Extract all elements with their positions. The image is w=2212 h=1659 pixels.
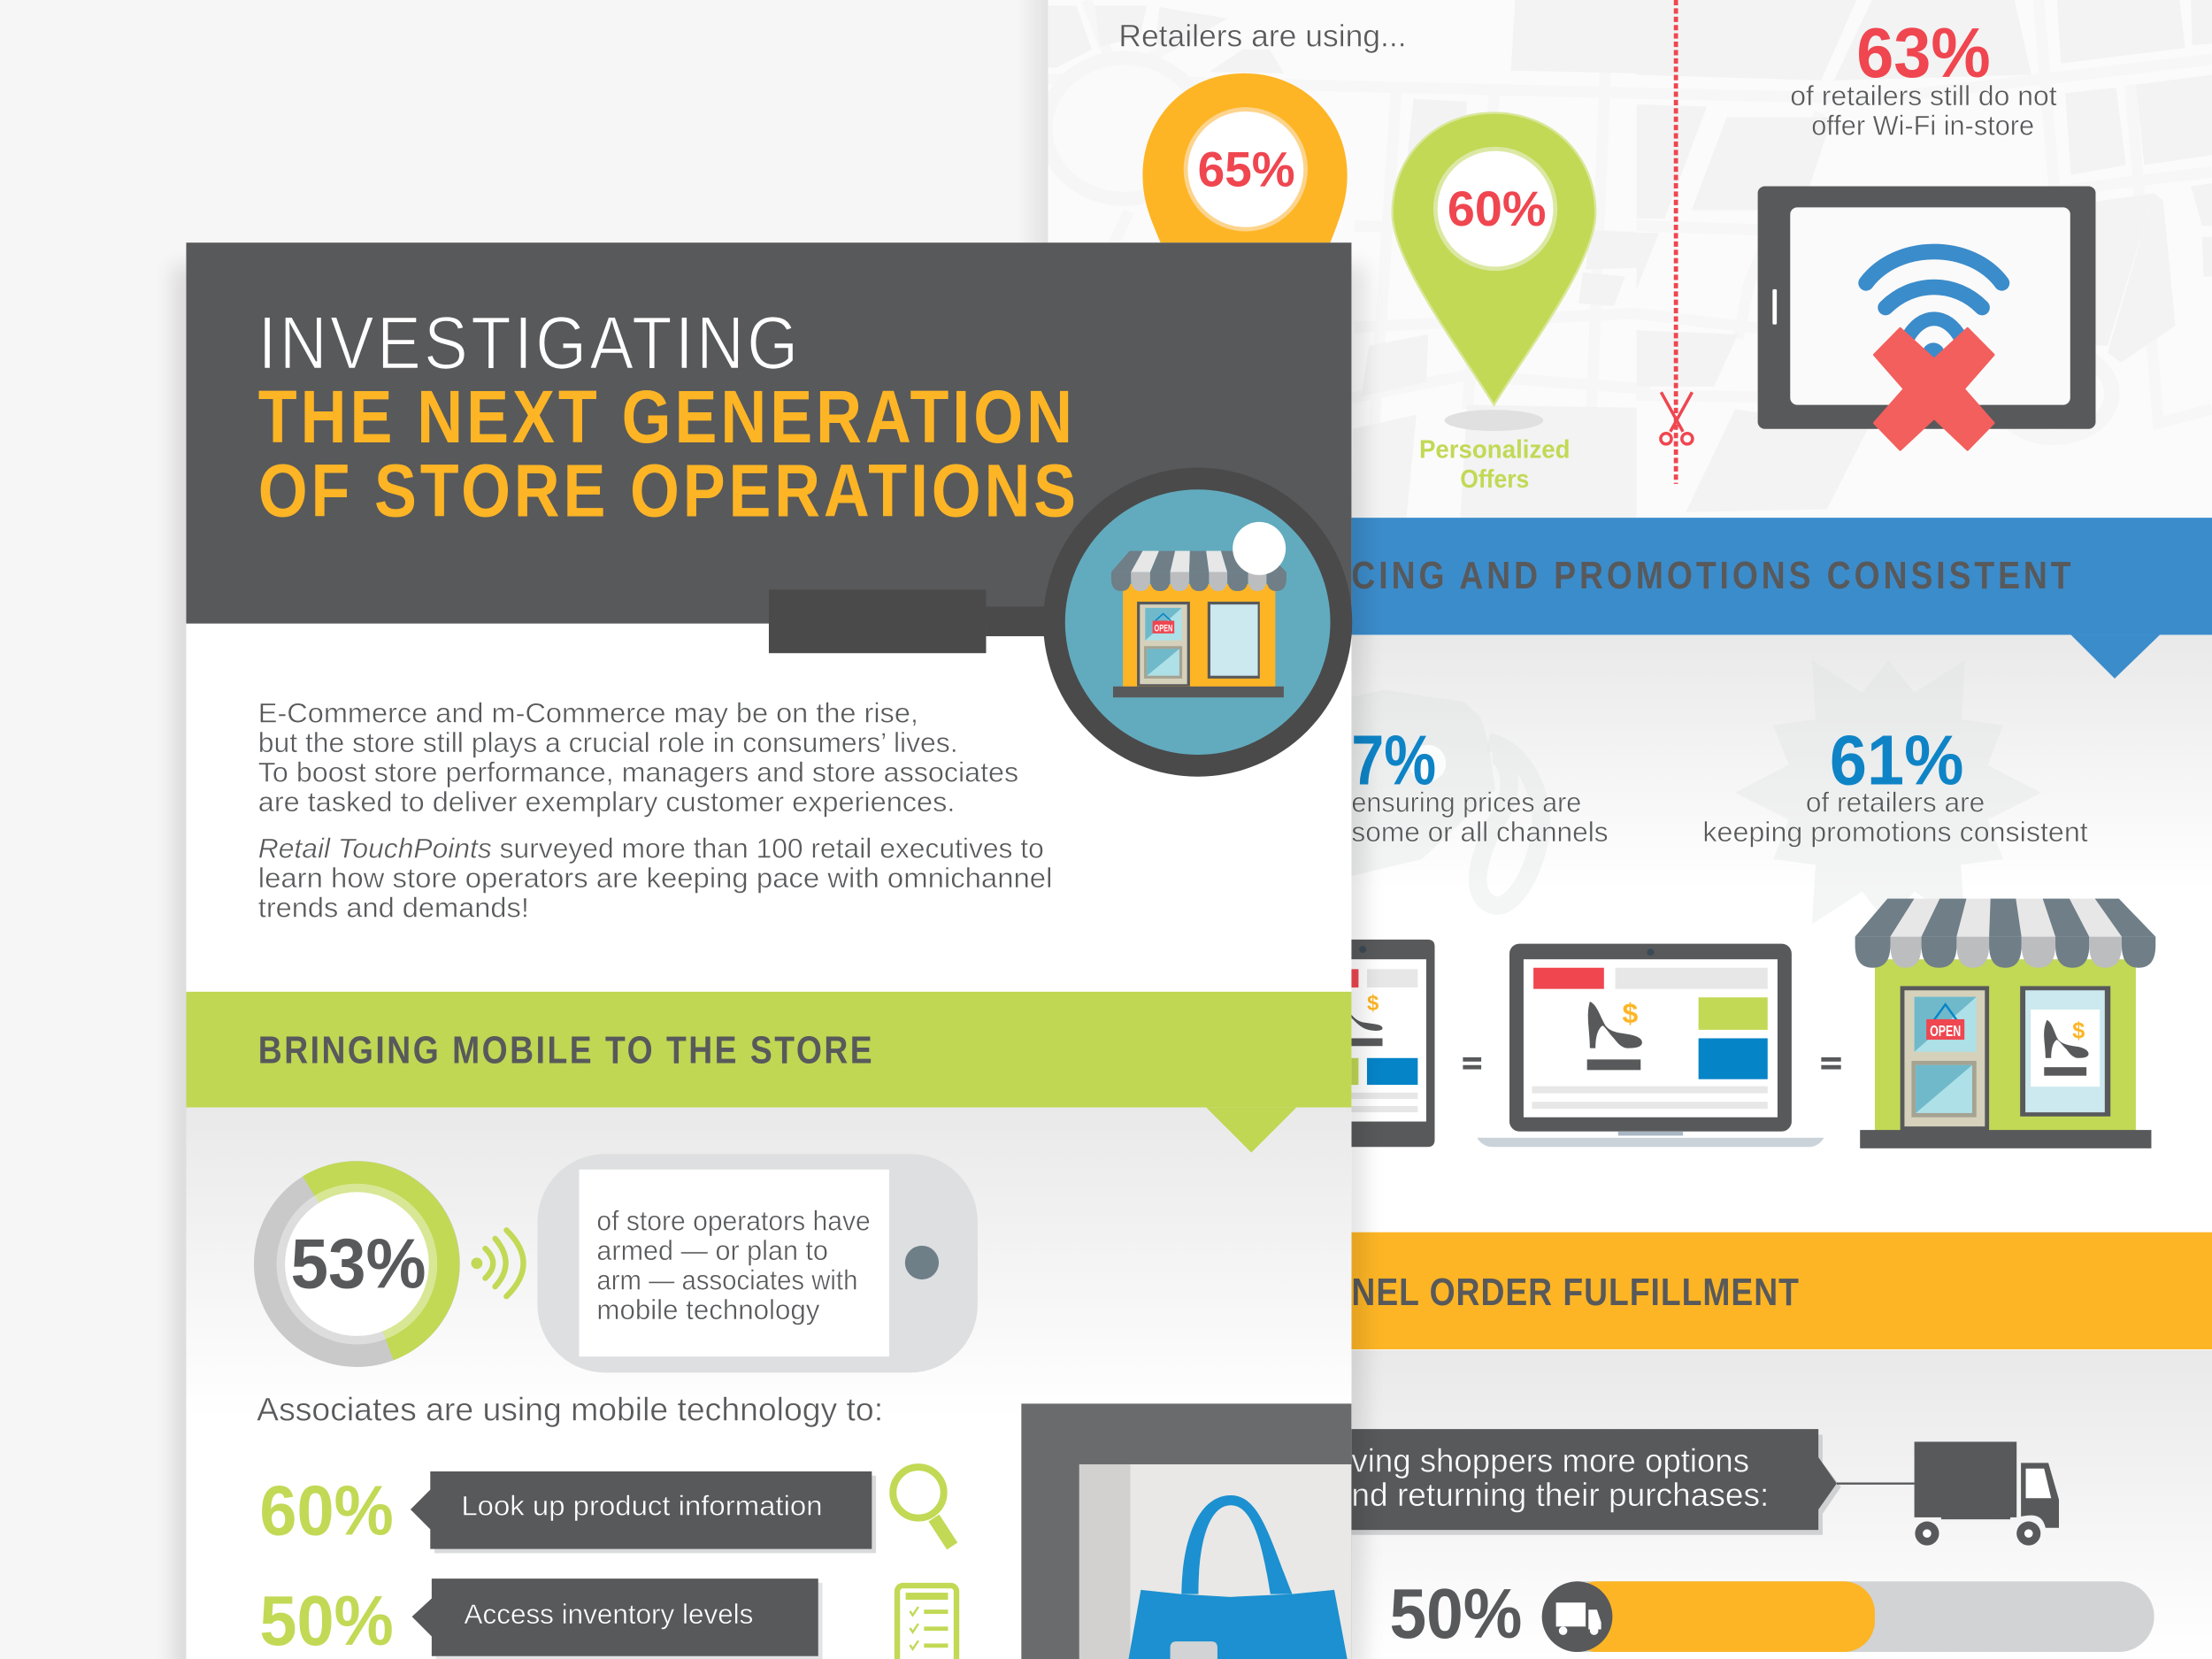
stat row: 60 percent look up — [259, 1467, 952, 1553]
decorative starburst — [1735, 660, 2041, 924]
stat: 61 percent promotions: keeping promotions consistent — [1702, 816, 2088, 848]
equals sign — [1821, 1057, 1841, 1070]
pin: 65 percent: 65% — [1198, 141, 1295, 196]
phone callout: of store operators have — [596, 1204, 871, 1236]
icon: tablet with product page — [1326, 940, 1434, 1147]
stat row: 50 percent inventory: Access inventory levels — [465, 1598, 753, 1630]
banner: pricing and promotions — [1048, 518, 2212, 888]
donut chart: 53 percent: 53% — [290, 1225, 426, 1303]
panel: shopping bag — [1021, 1403, 1351, 1659]
store — [1111, 522, 1286, 697]
text: retailers are using: Retailers are using... — [1118, 19, 1407, 54]
front sheet — [173, 242, 1365, 1659]
subheading: associates: Associates are using mobile technology to: — [257, 1392, 883, 1428]
door: OPEN — [1930, 1022, 1961, 1040]
title: OF STORE OPERATIONS — [258, 449, 1076, 533]
phone callout: mobile technology — [596, 1294, 819, 1325]
stat: 7 percent prices: some or all channels — [1351, 816, 1609, 848]
bag body — [1129, 1590, 1348, 1659]
title: INVESTIGATING — [258, 301, 798, 385]
stat: 63 percent no wifi: 63% — [1856, 13, 1991, 92]
connector line — [1837, 1483, 1915, 1485]
stat row: 50 percent inventory: 50% — [259, 1581, 394, 1659]
pin shadow — [1445, 410, 1543, 431]
dashed cut line — [1675, 0, 1678, 484]
banner: omnichannel order fulfillment — [1048, 1233, 2212, 1659]
wifi symbol — [1866, 251, 2001, 339]
stat: 7 percent prices: ensuring prices are — [1351, 787, 1581, 818]
awning — [1855, 899, 2155, 968]
decorative price tag behind 7 percent — [1351, 690, 1541, 906]
stat row: 60 percent look up: 60% — [259, 1471, 394, 1550]
text block: intro: E-Commerce and m-Commerce may be on the rise, — [258, 696, 918, 728]
header — [186, 242, 1351, 624]
pin label: Personalized — [1419, 435, 1571, 464]
red cross — [1875, 328, 1993, 449]
title — [258, 301, 1076, 533]
pin: 60 percent personalized offers — [1393, 113, 1595, 494]
pin marker — [1393, 113, 1595, 405]
icon: checklist — [897, 1586, 956, 1659]
equals sign — [1463, 1057, 1481, 1070]
bag tag — [1171, 1641, 1217, 1659]
phone callout: arm — associates with — [596, 1263, 857, 1295]
stat: 7 percent prices — [1351, 720, 1609, 848]
stat row: 50 percent inventory — [259, 1578, 956, 1659]
track — [1542, 1581, 2154, 1652]
store window — [2020, 986, 2110, 1117]
icon: delivery truck — [1915, 1441, 2059, 1546]
stat: 50 percent progress bar: 50% — [1389, 1574, 1522, 1653]
stat: 63 percent no wifi: of retailers still do not — [1790, 80, 2057, 111]
text block: intro: are tasked to deliver exemplary customer experiences. — [258, 786, 955, 818]
fill — [1566, 1581, 1875, 1652]
title: THE NEXT GENERATION — [258, 374, 1072, 458]
door — [1901, 986, 1989, 1133]
icon: tablet with product page: $ — [1367, 992, 1379, 1016]
panel: map background — [1045, 0, 2212, 518]
pin: 65 percent — [1142, 73, 1348, 254]
pin label — [1419, 435, 1571, 494]
text block: intro: learn how store operators are keeping pace with omnichannel — [258, 862, 1052, 894]
text block: intro: To boost store performance, managers and store associates — [258, 756, 1018, 787]
icon: scissors — [1661, 392, 1693, 444]
icon: magnifier — [893, 1467, 952, 1546]
banner: omnichannel order fulfillment: NEL ORDER FULFILLMENT — [1351, 1270, 1799, 1314]
banner: bringing mobile to the store — [186, 992, 1351, 1417]
truck badge — [1542, 1581, 1612, 1652]
stat: 63 percent no wifi: offer Wi-Fi in-store — [1811, 109, 2034, 141]
icon: laptop with product page: $ — [1623, 997, 1639, 1029]
text block: intro — [258, 696, 1052, 923]
store: OPEN — [1155, 624, 1172, 634]
back sheet — [1018, 0, 2212, 1659]
icon: green store front — [1855, 899, 2155, 1148]
pin: 60 percent personalized offers: 60% — [1448, 180, 1546, 236]
icon: laptop with product page — [1477, 944, 1824, 1147]
icon: signal waves — [472, 1230, 524, 1296]
stat: 50 percent progress bar — [1389, 1574, 2154, 1653]
stat: 61 percent promotions: 61% — [1830, 720, 1963, 799]
stat row: 60 percent look up: Look up product information — [461, 1489, 823, 1521]
donut chart: 53 percent — [254, 1161, 460, 1367]
stat: 61 percent promotions — [1702, 720, 2088, 848]
icon: tablet no wifi — [1758, 186, 2095, 449]
banner: bringing mobile to the store: BRINGING MOBILE TO THE STORE — [258, 1028, 872, 1071]
callout: giving shoppers more options: ving shoppers more options — [1351, 1443, 1749, 1479]
high heel shoe — [1588, 1002, 1642, 1048]
banner: pricing and promotions: CING AND PROMOTIONS CONSISTENT — [1351, 553, 2071, 597]
text block: intro: but the store still plays a crucial role in consumers’ lives. — [258, 726, 958, 758]
bag handle — [1181, 1495, 1292, 1594]
stat: 61 percent promotions: of retailers are — [1806, 787, 1985, 818]
callout: giving shoppers more options: nd returning their purchases: — [1351, 1477, 1769, 1513]
callout: giving shoppers more options — [1326, 1429, 1841, 1535]
sheet shadow — [1018, 0, 1048, 1659]
icon: magnifier with store — [769, 468, 1352, 777]
phone callout — [537, 1154, 978, 1372]
text block: intro: trends and demands! — [258, 891, 529, 923]
sheet soft shadow — [173, 265, 1365, 1659]
stat: 7 percent prices: 7% — [1351, 720, 1436, 799]
text block: intro: Retail TouchPoints surveyed more than 100 retail executives to — [258, 832, 1044, 864]
phone callout: armed — or plan to — [596, 1234, 828, 1266]
pin label: Offers — [1460, 465, 1529, 494]
stat: 63 percent no wifi — [1790, 13, 2057, 141]
store window: $ — [2072, 1018, 2085, 1043]
